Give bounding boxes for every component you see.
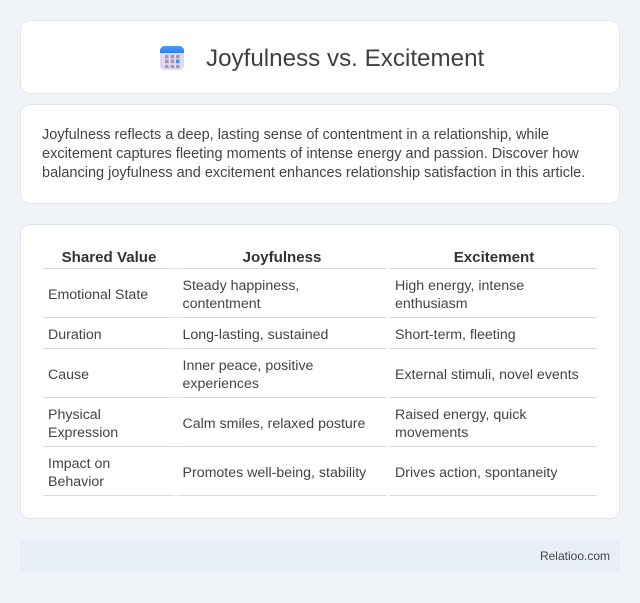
intro panel <box>20 104 620 204</box>
intro text: Joyfulness reflects a deep, lasting sense of contentment in a relationship, while <box>42 127 549 143</box>
row: cause: External stimuli, novel events <box>395 367 579 383</box>
row: cause: experiences <box>182 376 259 392</box>
footer bar <box>20 539 620 573</box>
row: emotional state: enthusiasm <box>395 296 468 312</box>
intro text <box>42 127 585 181</box>
row: duration: Long-lasting, sustained <box>182 327 328 343</box>
row: cause: Inner peace, positive <box>182 358 313 374</box>
row: impact on behavior: Drives action, spontaneity <box>395 465 557 481</box>
row: cause <box>48 358 579 392</box>
row: impact on behavior <box>48 456 558 490</box>
row: physical expression: movements <box>395 425 468 441</box>
row: duration: Short-term, fleeting <box>395 327 516 343</box>
comparison table panel <box>20 224 620 519</box>
row: cause: Cause <box>48 367 89 383</box>
row: emotional state: Steady happiness, <box>182 278 299 294</box>
row: physical expression: Physical <box>48 407 101 423</box>
row: duration: Duration <box>48 327 102 343</box>
intro text: balancing joyfulness and excitement enhances relationship satisfaction in this article. <box>42 165 585 181</box>
row: physical expression <box>48 407 526 441</box>
row: impact on behavior: Behavior <box>48 474 104 490</box>
row: emotional state: contentment <box>182 296 261 312</box>
row: emotional state <box>48 278 524 312</box>
row: physical expression: Calm smiles, relaxed posture <box>182 416 365 432</box>
row: impact on behavior: Promotes well-being, stability <box>182 465 366 481</box>
footer credit: Relatioo.com <box>540 549 610 563</box>
row: physical expression: Raised energy, quick <box>395 407 526 423</box>
icon: calendar <box>160 46 184 70</box>
row: physical expression: Expression <box>48 425 118 441</box>
table header <box>62 249 534 266</box>
table header: Joyfulness <box>243 249 321 266</box>
intro text: excitement captures fleeting moments of intense energy and passion. Discover how <box>42 146 579 162</box>
row: emotional state: Emotional State <box>48 287 148 303</box>
header panel <box>20 20 620 94</box>
table header: Excitement <box>454 249 534 266</box>
row: impact on behavior: Impact on <box>48 456 110 472</box>
row: emotional state: High energy, intense <box>395 278 524 294</box>
table header: Shared Value <box>62 249 156 266</box>
title: Joyfulness vs. Excitement <box>206 45 484 72</box>
row: duration <box>48 327 516 343</box>
